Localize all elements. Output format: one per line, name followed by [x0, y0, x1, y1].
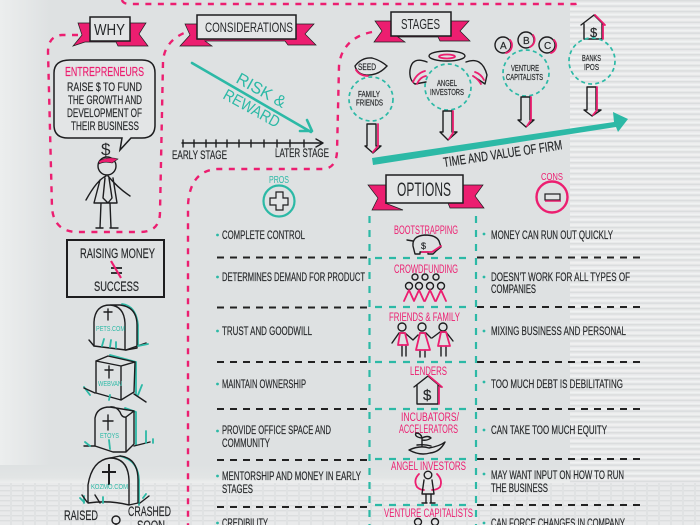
heading: options: OPTIONS	[397, 180, 451, 201]
stage: angel investors	[410, 51, 487, 140]
option: crowdfunding: CROWDFUNDING	[394, 264, 458, 276]
stage: seed, family and friends: FRIENDS	[356, 98, 383, 108]
con: input on running business: THE BUSINESS	[491, 483, 548, 495]
heading: considerations: CONSIDERATIONS	[205, 19, 293, 35]
pro: trust and goodwill: TRUST AND GOODWILL	[222, 326, 312, 338]
timeline: early to later stage	[172, 139, 329, 162]
tombstone: webvan	[84, 355, 146, 402]
speech bubble: entrepreneurs: THE GROWTH AND	[68, 93, 142, 107]
option: angel investors	[391, 461, 466, 503]
con: too much equity: CAN TAKE TOO MUCH EQUITY	[491, 425, 607, 437]
callout: raising money does not equal success	[67, 240, 164, 297]
column: cons	[483, 230, 630, 525]
heading: stages	[374, 12, 470, 42]
stage: seed, family and friends: SEED	[358, 62, 376, 72]
arrow: risk and reward	[192, 63, 312, 132]
speech bubble: entrepreneurs: DEVELOPMENT OF	[67, 106, 142, 120]
icon: pros plus: PROS	[269, 174, 289, 186]
con: too much equity	[483, 425, 607, 437]
stage: venture capitalists: A	[500, 41, 507, 52]
icon: pros plus	[264, 174, 294, 216]
icon: stick man with dollar sign: $	[101, 140, 111, 159]
pro: mentorship: MENTORSHIP AND MONEY IN EARLY	[222, 471, 361, 483]
timeline: early to later stage: LATER STAGE	[275, 146, 329, 160]
tombstone: webvan: WEBVAN	[98, 381, 122, 388]
caption: raised and crashed soon: CRASHED	[128, 504, 171, 519]
arrow: time and value of firm: TIME AND VALUE OF FIRM	[442, 137, 563, 170]
option: bootstrapping: $	[421, 241, 426, 251]
callout: raising money does not equal success: RAISING MONEY	[80, 246, 155, 261]
speech bubble: entrepreneurs: THEIR BUSINESS	[71, 119, 139, 133]
callout: raising money does not equal success: SUCCESS	[94, 279, 139, 294]
pro: maintain ownership: MAINTAIN OWNERSHIP	[222, 379, 306, 391]
option: lenders: $	[423, 387, 432, 404]
heading: why: WHY	[94, 22, 125, 39]
pro: determines demand: DETERMINES DEMAND FOR PRODUCT	[222, 272, 365, 284]
stage: seed, family and friends: FAMILY	[358, 89, 380, 99]
stage: banks and IPOs: IPOS	[584, 62, 599, 72]
speech bubble: entrepreneurs: RAISE $ TO FUND	[67, 80, 142, 94]
stage: venture capitalists: B	[523, 36, 530, 47]
top dashed border	[122, 0, 579, 4]
column: pros	[216, 230, 365, 525]
arrow: risk and reward: RISK &	[233, 70, 289, 112]
pro: mentorship	[216, 471, 361, 496]
dashed panel: why	[48, 33, 184, 232]
tombstone: etoys	[84, 407, 153, 452]
heading: considerations	[180, 15, 316, 46]
con: input on running business: MAY WANT INPUT ON HOW TO RUN	[491, 470, 624, 482]
pro: office space	[216, 425, 331, 450]
caption: raised and crashed soon: RAISED	[64, 508, 98, 523]
option: venture capitalists: VENTURE CAPITALISTS	[384, 508, 473, 520]
dashed row dividers	[217, 258, 642, 507]
con: money runs out: MONEY CAN RUN OUT QUICKLY	[491, 230, 613, 242]
options grid	[370, 216, 476, 525]
tombstone: etoys: ETOYS	[100, 433, 119, 440]
pro: complete control: COMPLETE CONTROL	[222, 230, 305, 242]
arrow: time and value of firm	[372, 112, 628, 170]
option: bootstrapping: BOOTSTRAPPING	[394, 225, 458, 237]
option: incubators and accelerators	[399, 412, 460, 454]
con: money runs out	[483, 230, 613, 242]
stage: seed, family and friends	[349, 58, 393, 153]
pro: office space: PROVIDE OFFICE SPACE AND	[222, 425, 331, 437]
heading: options	[368, 175, 484, 210]
dashed panel: considerations and options	[188, 32, 372, 525]
stage: venture capitalists	[495, 32, 556, 127]
pro: mentorship: STAGES	[222, 484, 253, 496]
stage: angel investors: INVESTORS	[430, 87, 464, 97]
caption: raised and crashed soon	[64, 504, 171, 525]
con: mixing business and personal: MIXING BUSINESS AND PERSONAL	[491, 326, 626, 338]
stage: venture capitalists: CAPITALISTS	[506, 72, 543, 82]
stage: banks and IPOs: BANKS	[582, 53, 601, 63]
option: lenders	[410, 366, 447, 404]
stage: venture capitalists: C	[544, 41, 551, 52]
tombstone: pets.com	[89, 304, 148, 350]
heading: stages: STAGES	[401, 16, 440, 33]
icon: cons minus	[536, 171, 568, 212]
option: crowdfunding	[394, 264, 458, 301]
stage: banks and IPOs: $	[590, 25, 598, 40]
tombstone: pets.com: PETS.COM	[96, 326, 125, 333]
option: lenders: LENDERS	[410, 366, 447, 378]
option: angel investors: ANGEL INVESTORS	[391, 461, 466, 473]
pro: maintain ownership	[216, 379, 306, 391]
con: input on running business	[483, 470, 624, 495]
pro: office space: COMMUNITY	[222, 438, 270, 450]
tombstone: kozmo.com: KOZMO.COM	[91, 484, 128, 491]
option: bootstrapping	[394, 225, 458, 254]
pro: complete control	[216, 230, 305, 242]
stage: angel investors: ANGEL	[437, 78, 457, 88]
option: friends and family	[389, 312, 460, 357]
con: too much debt: TOO MUCH DEBT IS DEBILITATING	[491, 379, 623, 391]
stage: venture capitalists: VENTURE	[511, 63, 539, 73]
heading: why	[73, 17, 148, 46]
stage: banks and IPOs	[569, 15, 615, 116]
timeline: early to later stage: EARLY STAGE	[172, 148, 227, 162]
option: venture capitalists	[384, 508, 473, 525]
speech bubble: entrepreneurs	[54, 60, 155, 150]
option: friends and family: FRIENDS & FAMILY	[389, 312, 460, 324]
option: incubators and accelerators: ACCELERATORS	[399, 424, 458, 436]
con: not all companies	[483, 272, 630, 296]
con: not all companies: COMPANIES	[491, 284, 536, 296]
con: not all companies: DOESN'T WORK FOR ALL TYPES OF	[491, 272, 630, 284]
speech bubble: entrepreneurs: ENTREPRENEURS	[65, 64, 144, 79]
tombstone: kozmo.com	[80, 456, 149, 505]
icon: stick man with dollar sign	[86, 140, 130, 228]
icon: cons minus: CONS	[541, 171, 563, 183]
option: incubators and accelerators: INCUBATORS/	[401, 412, 460, 424]
pro: trust and goodwill	[216, 326, 312, 338]
arrow: risk and reward: REWARD	[220, 87, 283, 132]
pro: credibility	[216, 518, 268, 525]
